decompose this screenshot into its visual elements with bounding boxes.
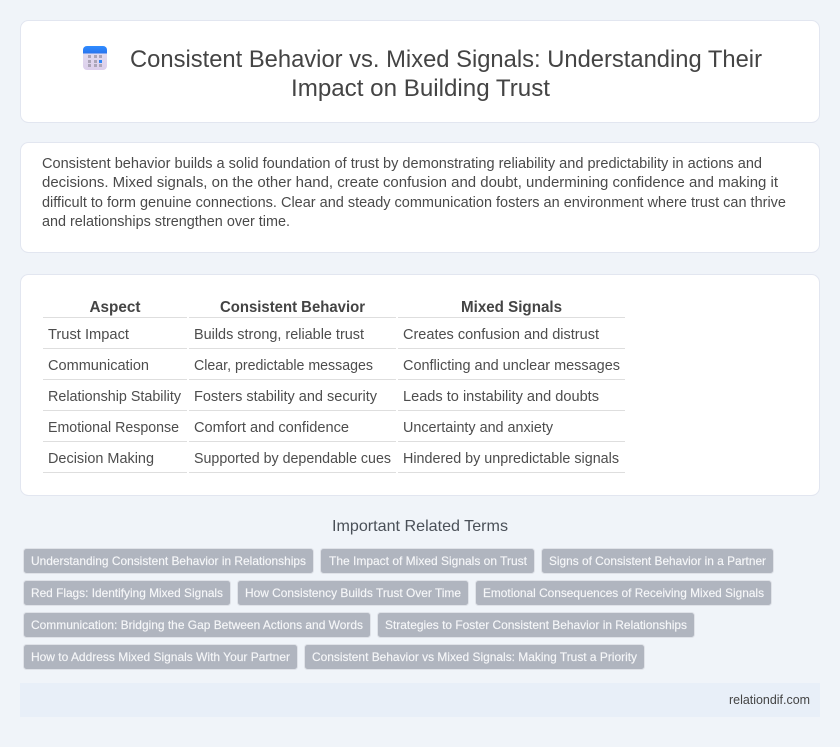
chip: How Consistency Builds Trust Over Time — [245, 586, 461, 600]
chip: Red Flags: Identifying Mixed Signals — [31, 586, 223, 600]
row: trust impact: Builds strong, reliable trust — [194, 327, 364, 343]
chip — [24, 644, 298, 670]
row: relationship stability: Fosters stability and security — [194, 389, 378, 405]
footer: relationdif.com — [729, 692, 810, 707]
panel: header — [20, 20, 820, 122]
row: communication: Conflicting and unclear messages — [403, 358, 620, 374]
chip — [24, 580, 230, 606]
chip: Consistent Behavior vs Mixed Signals: Making Trust a Priority — [312, 650, 637, 664]
row: decision making: Hindered by unpredictable signals — [403, 451, 619, 467]
row: decision making: Decision Making — [48, 451, 154, 467]
chip — [476, 580, 772, 606]
chip: Strategies to Foster Consistent Behavior in Relationships — [385, 618, 687, 632]
row: trust impact: Creates confusion and distrust — [403, 327, 599, 343]
text block: introduction — [42, 156, 786, 230]
row: relationship stability: Leads to instability and doubts — [403, 389, 599, 405]
table header — [90, 299, 562, 316]
chip — [542, 548, 774, 574]
chip: How to Address Mixed Signals With Your Partner — [31, 650, 290, 664]
chip — [378, 612, 694, 638]
text block: introduction: difficult to form genuine connections. Clear and steady communication fosters an environment where trust can thrive — [42, 195, 786, 211]
row: decision making: Supported by dependable cues — [194, 451, 391, 467]
row: decision making — [48, 451, 619, 467]
related terms chips — [24, 548, 774, 670]
chip: The Impact of Mixed Signals on Trust — [329, 554, 528, 568]
row: emotional response — [48, 420, 554, 436]
row: trust impact: Trust Impact — [48, 327, 129, 343]
panel: comparison table — [20, 274, 820, 496]
text block: introduction: Consistent behavior builds a solid foundation of trust by demonstrating reliability and predictability in actions and — [42, 156, 762, 172]
row: relationship stability — [48, 389, 599, 405]
chip: Emotional Consequences of Receiving Mixed Signals — [483, 586, 764, 600]
panel: introduction — [20, 142, 820, 252]
chip: Communication: Bridging the Gap Between Actions and Words — [31, 618, 363, 632]
row: emotional response: Emotional Response — [48, 420, 179, 436]
table header: Consistent Behavior — [220, 299, 365, 316]
title — [130, 46, 762, 102]
chip — [238, 580, 468, 606]
chip — [24, 612, 370, 638]
chip — [320, 548, 534, 574]
table header: Aspect — [90, 299, 141, 316]
title: Impact on Building Trust — [291, 75, 550, 102]
row: emotional response: Comfort and confidence — [194, 420, 349, 436]
row: communication: Communication — [48, 358, 149, 374]
chip — [24, 548, 314, 574]
text block: introduction: and relationships strengthen over time. — [42, 214, 290, 230]
heading: important related terms: Important Related Terms — [332, 518, 508, 535]
row: relationship stability: Relationship Stability — [48, 389, 182, 405]
table header: Mixed Signals — [461, 299, 562, 316]
row: emotional response: Uncertainty and anxiety — [403, 420, 554, 436]
chip — [304, 644, 644, 670]
chip: Signs of Consistent Behavior in a Partner — [549, 554, 766, 568]
footer — [20, 683, 820, 717]
row: communication: Clear, predictable messages — [194, 358, 373, 374]
row: trust impact — [48, 327, 599, 343]
text block: introduction: decisions. Mixed signals, on the other hand, create confusion and doubt, undermining confidence and making it — [42, 175, 778, 191]
row: communication — [48, 358, 620, 374]
icon: calendar — [83, 46, 107, 70]
title: Consistent Behavior vs. Mixed Signals: Understanding Their — [130, 46, 762, 73]
chip: Understanding Consistent Behavior in Relationships — [31, 554, 306, 568]
